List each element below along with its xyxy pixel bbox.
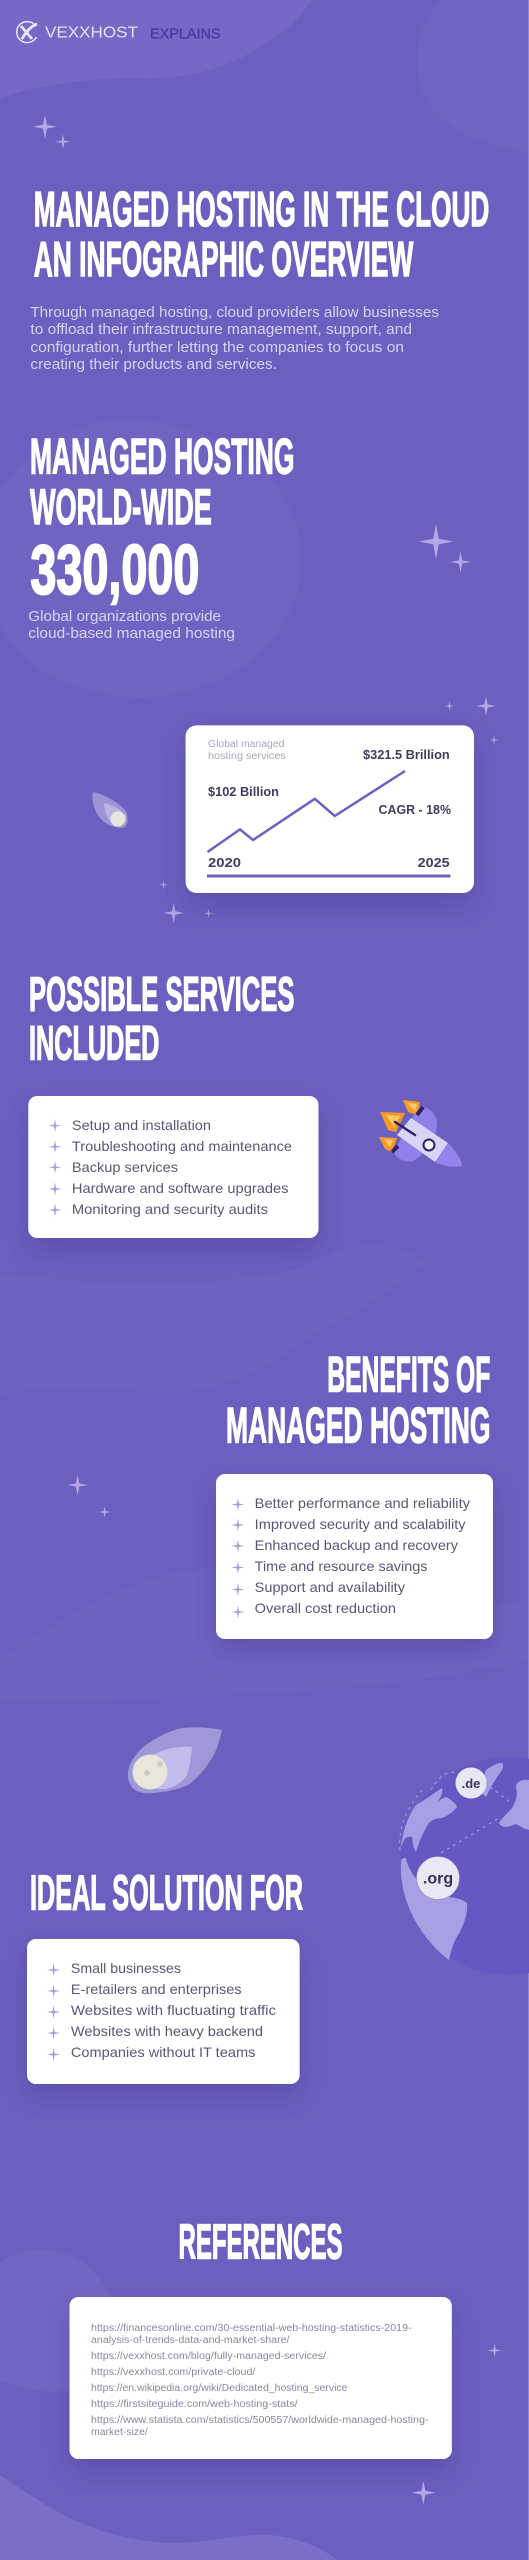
title xyxy=(34,183,489,287)
heading: possible services included: INCLUDED xyxy=(29,1017,159,1070)
icon: vexxhost mark xyxy=(17,22,37,43)
intro paragraph xyxy=(30,304,439,373)
stat caption: cloud-based managed hosting xyxy=(28,625,235,642)
list text: Hardware and software upgrades xyxy=(72,1180,289,1196)
CAGR label: CAGR - 18% xyxy=(378,803,451,817)
bullets xyxy=(48,1119,62,1216)
bullets xyxy=(231,1498,244,1618)
heading: possible services included xyxy=(29,968,294,1070)
year start: 2020 xyxy=(208,856,241,870)
domain: .org: .org xyxy=(423,1870,453,1888)
list text: Websites with heavy backend xyxy=(71,2023,263,2039)
icon: large meteor xyxy=(128,1727,222,1793)
stat caption: Global organizations provide xyxy=(28,608,221,625)
list text: Better performance and reliability xyxy=(255,1495,470,1511)
list text: Setup and installation xyxy=(72,1117,211,1133)
bullets xyxy=(47,1964,60,2061)
value 2025: $321.5 Brillion xyxy=(363,748,450,762)
list text: Backup services xyxy=(72,1159,178,1175)
list text: Websites with fluctuating traffic xyxy=(71,2002,276,2018)
chart caption xyxy=(208,739,286,762)
icon: small meteor xyxy=(92,792,128,828)
list text: Support and availability xyxy=(255,1579,405,1595)
domain: .de: .de xyxy=(462,1776,480,1791)
dotted routes xyxy=(400,1772,510,1853)
list text: E-retailers and enterprises xyxy=(71,1981,242,1997)
panel: benefits list xyxy=(216,1474,493,1639)
heading: possible services included: POSSIBLE SERVICES xyxy=(29,968,294,1021)
list text: Small businesses xyxy=(71,1960,181,1976)
chart caption: hosting services xyxy=(208,751,286,762)
line chart xyxy=(208,771,405,852)
icon: sparkles top xyxy=(33,115,70,149)
big number: 330,000 xyxy=(30,530,199,608)
panel: services list xyxy=(28,1096,319,1238)
heading: managed hosting world-wide xyxy=(30,428,294,535)
list text: Monitoring and security audits xyxy=(72,1201,268,1217)
axis xyxy=(207,874,450,878)
list text: Troubleshooting and maintenance xyxy=(72,1138,292,1154)
reference links: https://vexxhost.com/blog/fully-managed-services/ xyxy=(91,2351,326,2362)
explains label: EXPLAINS xyxy=(150,25,220,42)
stat caption xyxy=(28,608,235,642)
list text xyxy=(71,1960,276,2060)
chart caption: Global managed xyxy=(208,739,284,750)
logo: VEXXHOST EXPLAINS xyxy=(17,22,220,43)
intro paragraph: creating their products and services. xyxy=(30,356,277,373)
reference links: https://financesonline.com/30-essential-web-hosting-statistics-2019- xyxy=(91,2323,412,2334)
list text: Overall cost reduction xyxy=(255,1600,396,1616)
panel: market growth chart xyxy=(186,725,474,893)
reference links: market-size/ xyxy=(91,2427,148,2438)
heading: benefits of managed hosting xyxy=(226,1346,490,1453)
domain: .de xyxy=(456,1768,486,1798)
list text xyxy=(255,1495,470,1616)
icon: rocket xyxy=(379,1100,462,1167)
text: REFERENCES xyxy=(178,2215,342,2269)
list text: Time and resource savings xyxy=(255,1558,428,1574)
intro paragraph: to offload their infrastructure management, support, and xyxy=(30,321,412,338)
wordmark: VEXXHOST xyxy=(45,24,139,42)
heading: managed hosting world-wide: WORLD-WIDE xyxy=(30,479,212,535)
heading: managed hosting world-wide: MANAGED HOSTING xyxy=(30,428,294,484)
intro paragraph: Through managed hosting, cloud providers allow businesses xyxy=(30,304,439,321)
reference links: https://www.statista.com/statistics/500557/worldwide-managed-hosting- xyxy=(91,2415,428,2426)
list text: Enhanced backup and recovery xyxy=(255,1537,458,1553)
domain: .org xyxy=(416,1856,460,1900)
icon: globe with domains xyxy=(400,1757,529,1975)
reference links: https://firstsiteguide.com/web-hosting-stats/ xyxy=(91,2399,298,2410)
list text: Improved security and scalability xyxy=(255,1516,466,1532)
panel: ideal solution list xyxy=(27,1939,300,2084)
reference links: https://en.wikipedia.org/wiki/Dedicated_hosting_service xyxy=(91,2383,348,2394)
icon: sparkles bottom xyxy=(411,2344,502,2505)
value 2020: $102 Billion xyxy=(208,785,279,799)
reference links: analysis-of-trends-data-and-market-share/ xyxy=(91,2335,290,2346)
icon: sparkles middle xyxy=(159,524,498,924)
panel: references list xyxy=(70,2297,452,2459)
reference links xyxy=(91,2323,428,2438)
year end: 2025 xyxy=(418,856,450,870)
icon: sparkles left xyxy=(67,1474,111,1518)
intro paragraph: configuration, further letting the companies to focus on xyxy=(30,339,404,356)
continents xyxy=(401,1763,529,1960)
list text xyxy=(72,1117,292,1217)
reference links: https://vexxhost.com/private-cloud/ xyxy=(91,2367,256,2378)
list text: Companies without IT teams xyxy=(71,2044,255,2060)
